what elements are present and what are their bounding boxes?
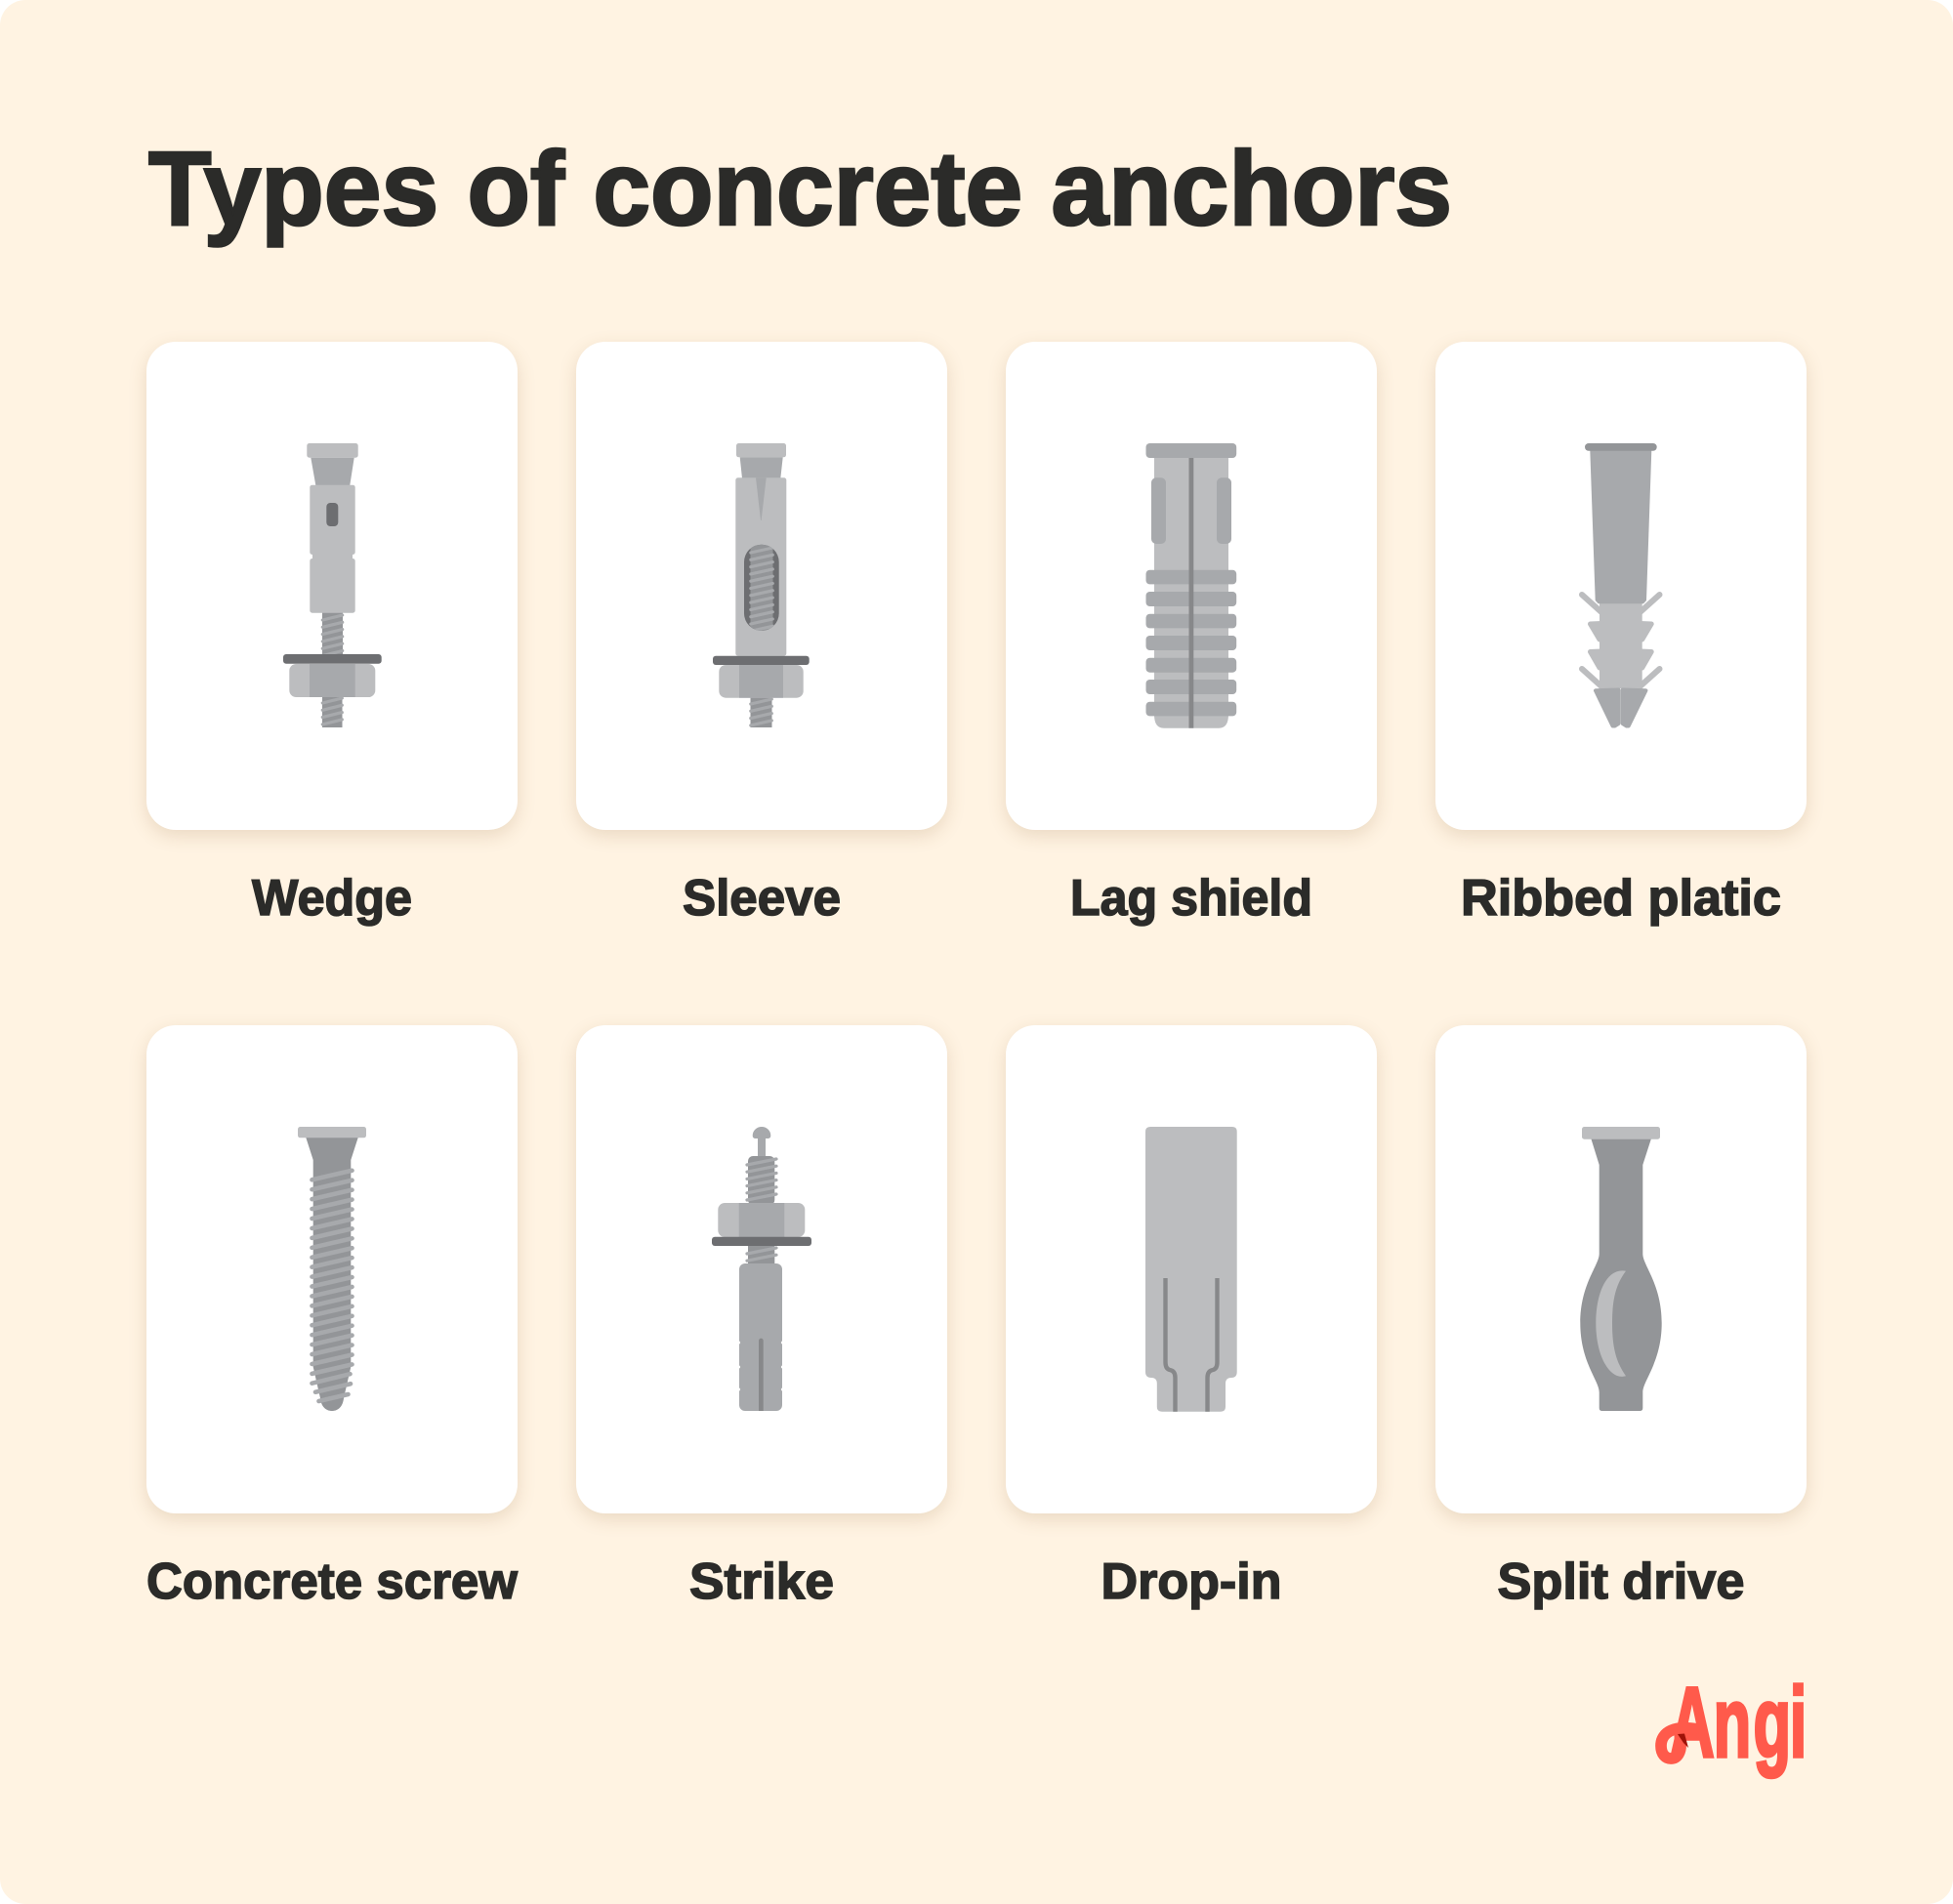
card: concrete screw xyxy=(146,1025,518,1513)
label: split drive: Split drive xyxy=(1498,1553,1744,1610)
label: lag shield: Lag shield xyxy=(1070,870,1312,927)
card: drop-in xyxy=(1006,1025,1377,1513)
card: ribbed plastic xyxy=(1435,342,1807,830)
label: concrete screw: Concrete screw xyxy=(146,1553,519,1610)
label: sleeve: Sleeve xyxy=(683,870,841,927)
card: wedge xyxy=(146,342,518,830)
panel: wedge xyxy=(141,342,523,927)
icon: lag shield anchor xyxy=(1146,443,1236,728)
panel: sleeve xyxy=(570,342,953,927)
label: strike: Strike xyxy=(689,1553,834,1610)
label: drop-in: Drop-in xyxy=(1101,1553,1281,1610)
card: sleeve xyxy=(576,342,947,830)
icon: strike anchor xyxy=(712,1127,811,1411)
label: wedge: Wedge xyxy=(252,870,412,927)
panel: ribbed plastic xyxy=(1430,342,1812,927)
title: Types of concrete anchors xyxy=(148,129,1452,247)
logo: Angi: Angi xyxy=(1670,1666,1807,1778)
card: strike xyxy=(576,1025,947,1513)
card: split drive xyxy=(1435,1025,1807,1513)
panel: lag shield xyxy=(1000,342,1383,927)
panel: split drive xyxy=(1430,1025,1812,1610)
panel: concrete screw xyxy=(141,1025,523,1610)
icon: drop-in anchor xyxy=(1145,1127,1237,1412)
icon: sleeve anchor xyxy=(713,443,810,727)
panel: drop-in xyxy=(1000,1025,1383,1610)
icon: split drive anchor xyxy=(1580,1127,1662,1411)
icon: concrete screw xyxy=(298,1127,366,1411)
panel: strike xyxy=(570,1025,953,1610)
icon: wedge anchor xyxy=(283,443,382,727)
icon: ribbed plastic anchor xyxy=(1582,443,1660,726)
label: ribbed plastic: Ribbed platic xyxy=(1461,870,1781,927)
card: lag shield xyxy=(1006,342,1377,830)
